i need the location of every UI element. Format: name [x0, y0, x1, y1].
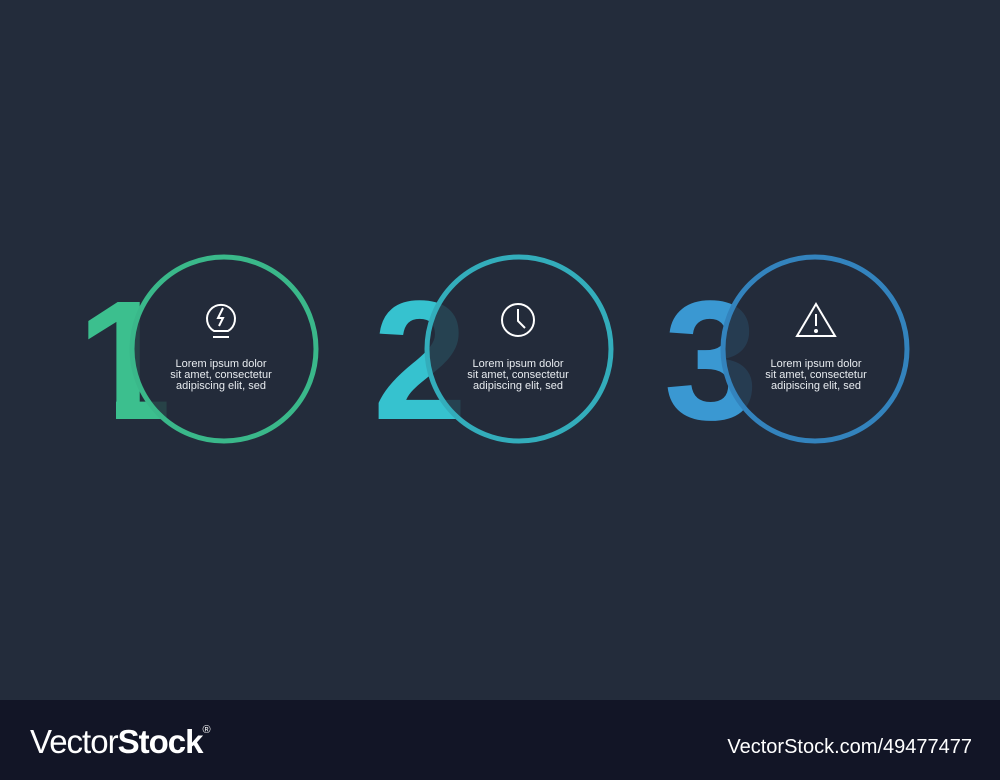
text 1: adipiscing elit, sed: [176, 380, 266, 392]
text 3: sit amet, consectetur: [765, 369, 867, 381]
icon: clock: [502, 304, 534, 336]
footer url: VectorStock.com/49477477: [727, 736, 972, 758]
text 2: adipiscing elit, sed: [473, 380, 563, 392]
icon: warning: [797, 304, 835, 336]
footer logo: ®: [202, 724, 210, 736]
circle 3: [723, 257, 907, 441]
number 2: 2: [373, 266, 467, 456]
step 2: [373, 257, 611, 456]
step 3: [664, 257, 907, 456]
text 3: adipiscing elit, sed: [771, 380, 861, 392]
text 1: Lorem ipsum dolor: [175, 358, 267, 370]
text 1: sit amet, consectetur: [170, 369, 272, 381]
number 3: 3: [664, 266, 758, 456]
circle 1: [132, 257, 316, 441]
circle 2: [427, 257, 611, 441]
footer logo: VectorStock: [30, 723, 202, 760]
step 1: [77, 257, 316, 456]
icon: light bulb: [207, 305, 235, 337]
text 2: Lorem ipsum dolor: [472, 358, 564, 370]
footer bar: [0, 700, 1000, 780]
text 3: Lorem ipsum dolor: [770, 358, 862, 370]
number 1: 1: [77, 266, 167, 456]
text 2: sit amet, consectetur: [467, 369, 569, 381]
